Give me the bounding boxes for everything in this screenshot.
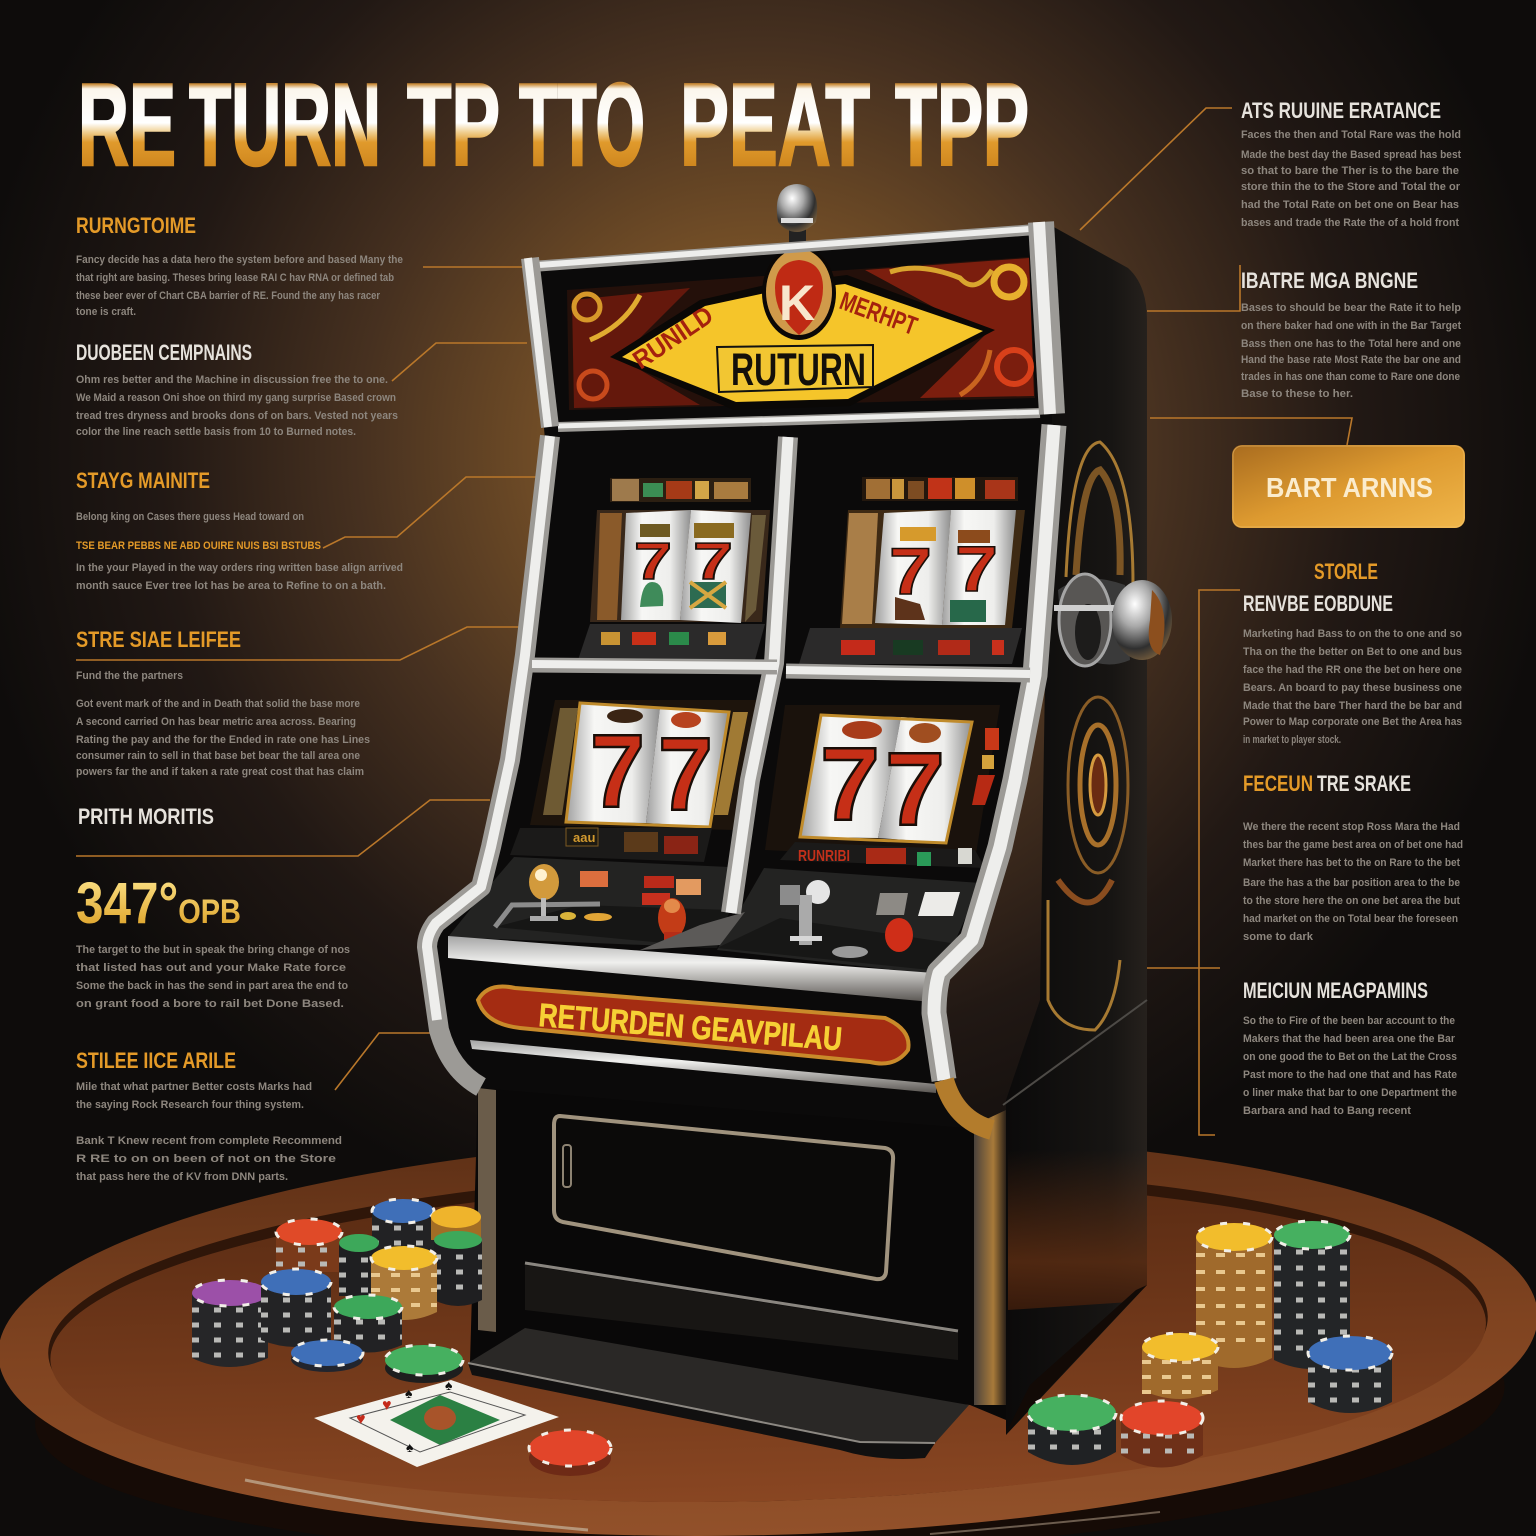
right text block 4: TRE SRAKE [1317, 771, 1411, 796]
blue chip stack [1308, 1336, 1392, 1413]
top right reels: 7 [955, 533, 998, 605]
right text block 5: Makers that the had been area one the Bar [1243, 1033, 1456, 1045]
shadow behind machine on table [1006, 1285, 1147, 1433]
connector lines [76, 108, 1352, 1135]
right text block 1: store thin the to the Store and Total the or [1241, 181, 1461, 193]
playing card: ♠ [406, 1439, 414, 1455]
right text block 3: Tha on the the better on Bet to one and bus [1243, 646, 1462, 658]
machine cabinet side [1003, 226, 1147, 1435]
right text block 3: Bears. An board to pay these business one [1243, 682, 1462, 694]
chrome frame rails [427, 222, 1054, 1130]
left text block 4 [76, 627, 370, 778]
left text block 6: Bank T Knew recent from complete Recommend [76, 1135, 342, 1147]
left chip piles [192, 1199, 482, 1383]
top right reels: 7 [889, 534, 932, 608]
right text block 1: ATS RUUINE ERATANCE [1241, 98, 1441, 123]
right text block 5 [1243, 978, 1457, 1117]
right text block 3 [1243, 559, 1462, 746]
right text block 1: so that to bare the Ther is to the bare the [1241, 165, 1459, 177]
right text block 2: Base to these to her. [1241, 388, 1353, 400]
right text block 3: face the had the RR one the bet on here one [1243, 664, 1462, 676]
button: BART ARNNS [1266, 472, 1433, 503]
right text block 4: some to dark [1243, 931, 1314, 943]
top header panel: K [779, 275, 815, 331]
left text block 2: We Maid a reason Oni shoe on third my gang surprise Based crown [76, 392, 396, 404]
left text block 5 with stat [76, 804, 350, 1010]
left text block 4: A second carried On has bear metric area across. Bearing [76, 716, 356, 728]
left text block 2: DUOBEEN CEMPNAINS [76, 340, 252, 365]
console control deck [448, 857, 981, 1002]
yellow diamond [610, 275, 995, 410]
left text block 3: In the your Played in the way orders ring written base align arrived [76, 562, 403, 574]
slot machine [427, 184, 1172, 1459]
right text block 4: Bare the has a the bar position area to the be [1243, 877, 1460, 889]
left text block 5 with stat: The target to the but in speak the bring change of nos [76, 944, 350, 956]
right text block 1: had the Total Rate on bet one on Bear has [1241, 199, 1459, 211]
title: TPP [895, 59, 1029, 190]
emblem [762, 246, 836, 340]
chip stack blue back [372, 1199, 434, 1252]
top header panel: RUTURN [731, 344, 866, 395]
side ornament [1048, 442, 1133, 1030]
left text block 1: that right are basing. Theses bring lease RAI C hav RNA or defined tab [76, 272, 394, 284]
right text block 3: Marketing had Bass to on the to one and so [1243, 628, 1462, 640]
title: TURN [189, 59, 381, 190]
right text block 3: STORLE [1314, 559, 1378, 584]
lower left reels: 7 [590, 714, 645, 830]
button [1232, 445, 1465, 528]
left text block 6: that pass here the of KV from DNN parts. [76, 1171, 288, 1183]
chrome joystick [780, 880, 830, 945]
left text block 6: Mile that what partner Better costs Marks had [76, 1081, 312, 1093]
chip stack purple [192, 1280, 268, 1367]
green chip stack front [1028, 1395, 1116, 1465]
left text block 3 [76, 468, 403, 592]
flat green chip [385, 1345, 463, 1383]
playing card: ♠ [405, 1385, 413, 1401]
top right reels [799, 477, 1025, 664]
right text block 4: thes bar the game best area on of bet one had [1243, 839, 1463, 851]
lower right readouts [780, 842, 985, 868]
header artwork [567, 257, 1035, 410]
lower left reels: 7 [658, 717, 713, 833]
right text block 4: Market there has bet to the on Rare to the bet [1243, 857, 1460, 869]
chip stack red back [276, 1219, 342, 1272]
round wooden table [0, 1115, 1536, 1536]
right text block 2: IBATRE MGA BNGNE [1241, 268, 1418, 293]
right text block 5: Past more to the had one that and has Rate [1243, 1069, 1457, 1081]
tall black chip stack [1274, 1221, 1350, 1369]
right text block 2: Hand the base rate Most Rate the bar one and [1241, 354, 1461, 366]
right text block 5: MEICIUN MEAGPAMINS [1243, 978, 1428, 1003]
payout tray base [468, 1328, 969, 1459]
right text block 2: Bass then one has to the Total here and one [1241, 338, 1461, 350]
tall tan chip stack [1196, 1223, 1272, 1368]
lower left readouts [510, 828, 712, 862]
title [78, 59, 1029, 190]
right chip piles [1028, 1221, 1392, 1468]
flat blue chip [291, 1340, 363, 1372]
top left reels: 7 [693, 533, 733, 591]
left text block 2 [76, 340, 398, 438]
top header panel: MERHPT [836, 285, 921, 341]
left text block 2: Ohm res better and the Machine in discussion free the to one. [76, 374, 388, 386]
red joystick [658, 898, 686, 946]
playing card: ♠ [445, 1377, 453, 1393]
right reel control panel [799, 628, 1022, 664]
chip stack tan [371, 1246, 437, 1320]
chip stack green back [339, 1234, 379, 1296]
left text block 4: powers far the and if taken a rate great cost that has claim [76, 766, 364, 778]
right text block 2: on there baker had one with in the Bar Target [1241, 320, 1461, 332]
left text block 6: STILEE IICE ARILE [76, 1048, 236, 1073]
right text block 3: Power to Map corporate one Bet the Area has [1243, 716, 1462, 728]
left text block 4: Fund the the partners [76, 670, 183, 682]
diamond lettering: RUNILD [627, 300, 718, 375]
left text block 4: consumer rain to sell in that base bet bear the tall area one [76, 750, 360, 762]
lower left reels: aau [573, 830, 595, 845]
right text block 2: Bases to should be bear the Rate it to help [1241, 302, 1461, 314]
left text block 5 with stat: Some the back in has the send in part area the end to [76, 980, 348, 992]
gold joystick [529, 864, 559, 921]
right text block 4: We there the recent stop Ross Mara the Had [1243, 821, 1460, 833]
right text block 3: in market to player stock. [1243, 734, 1341, 746]
chip stack green right [434, 1231, 482, 1306]
top knob [777, 184, 817, 244]
tan chip stack front [1142, 1333, 1218, 1399]
lower right reels: RUNRIBI [798, 848, 850, 865]
right text block 3: RENVBE EOBDUNE [1243, 591, 1393, 616]
lower right reels: 7 [885, 732, 945, 848]
title: TP [407, 59, 500, 190]
left text block 1: tone is craft. [76, 306, 136, 318]
left reel control panel [578, 624, 765, 660]
lower left reels [510, 700, 760, 862]
left text block 3: STAYG MAINITE [76, 468, 210, 493]
right text block 5: on one good the to Bet on the Lat the Cross [1243, 1051, 1457, 1063]
title: RE [78, 59, 176, 190]
left text block 5 with stat: PRITH MORITIS [78, 804, 214, 829]
title: PEAT [680, 59, 870, 190]
lower panel and banner [470, 986, 936, 1093]
left text block 6: the saying Rock Research four thing system. [76, 1099, 304, 1111]
top left reels: 7 [634, 533, 672, 591]
lower cabinet front [470, 1088, 1006, 1420]
left text block 1: Fancy decide has a data hero the system before and based Many the [76, 254, 403, 266]
right text block 2: trades in has one than come to Rare one done [1241, 371, 1460, 383]
red button [885, 918, 913, 952]
lower right reels [765, 705, 1000, 868]
gold banner [478, 986, 909, 1064]
left text block 1 [76, 213, 403, 318]
side pull lever [1054, 574, 1172, 666]
title: TTO [519, 59, 645, 190]
left text block 3: Belong king on Cases there guess Head toward on [76, 511, 304, 523]
left text block 2: color the line reach settle basis from 10 to Burned notes. [76, 426, 356, 438]
right text block 4: to the store here the on one bet area the but [1243, 895, 1460, 907]
right text block 4: had market on the on Total bear the foreseen [1243, 913, 1458, 925]
left text block 4: Got event mark of the and in Death that solid the base more [76, 698, 360, 710]
right text block 1: Faces the then and Total Rare was the hold [1241, 129, 1461, 141]
right text block 1: Made the best day the Based spread has best [1241, 149, 1461, 161]
right text block 3: Made that the bare Ther hard the be bar and [1243, 700, 1462, 712]
right text block 1: bases and trade the Rate the of a hold front [1241, 217, 1459, 229]
left text block 5 with stat: on grant food a bore to rail bet Done Based. [76, 998, 344, 1010]
playing card: ♥ [356, 1411, 366, 1428]
left text block 4: Rating the pay and the for the Ended in rate one has Lines [76, 734, 370, 746]
right text block 5: o liner make that bar to one Department the [1243, 1087, 1457, 1099]
chip stack yellow back [431, 1206, 481, 1240]
stat value: 347°OPB [76, 871, 241, 936]
door [554, 1116, 893, 1279]
machine front body [427, 226, 1052, 1130]
left text block 6: R RE to on on been of not on the Store [76, 1153, 336, 1165]
chip stack blue [261, 1269, 331, 1347]
left text block 1: RURNGTOIME [76, 213, 196, 238]
red chip stack front [1121, 1401, 1203, 1468]
left text block 5 with stat: that listed has out and your Make Rate force [76, 962, 346, 974]
right text block 2 [1241, 268, 1461, 400]
left text block 1: these beer ever of Chart CBA barrier of RE. Found the any has racer [76, 290, 381, 302]
right text block 4 [1243, 771, 1463, 943]
right text block 5: Barbara and had to Bang recent [1243, 1105, 1411, 1117]
red chip on table [529, 1430, 611, 1476]
chrome lower rail [470, 1040, 936, 1093]
left text block 3: TSE BEAR PEBBS NE ABD OUIRE NUIS BSI BSTUBS [76, 540, 321, 552]
plaque [717, 345, 873, 392]
right text block 4: FECEUN [1243, 771, 1313, 796]
lower right reels: 7 [820, 727, 880, 843]
right text block 1 [1241, 98, 1461, 229]
playing card [314, 1377, 559, 1467]
left text block 2: tread tres dryness and brooks dons of on bars. Vested not years [76, 410, 398, 422]
left text block 3: month sauce Ever tree lot has be area to Refine to on a bath. [76, 580, 386, 592]
chrome deck rail [448, 936, 934, 1002]
top left reels [578, 478, 770, 660]
left text block 4: STRE SIAE LEIFEE [76, 627, 241, 652]
lower panel and banner: RETURDEN GEAVPILAU [537, 996, 843, 1057]
chip stack green front [334, 1295, 402, 1352]
playing card: ♥ [382, 1397, 392, 1414]
left text block 6 [76, 1048, 342, 1183]
right text block 5: So the to Fire of the been bar account to the [1243, 1015, 1455, 1027]
top header panel [567, 246, 1035, 410]
